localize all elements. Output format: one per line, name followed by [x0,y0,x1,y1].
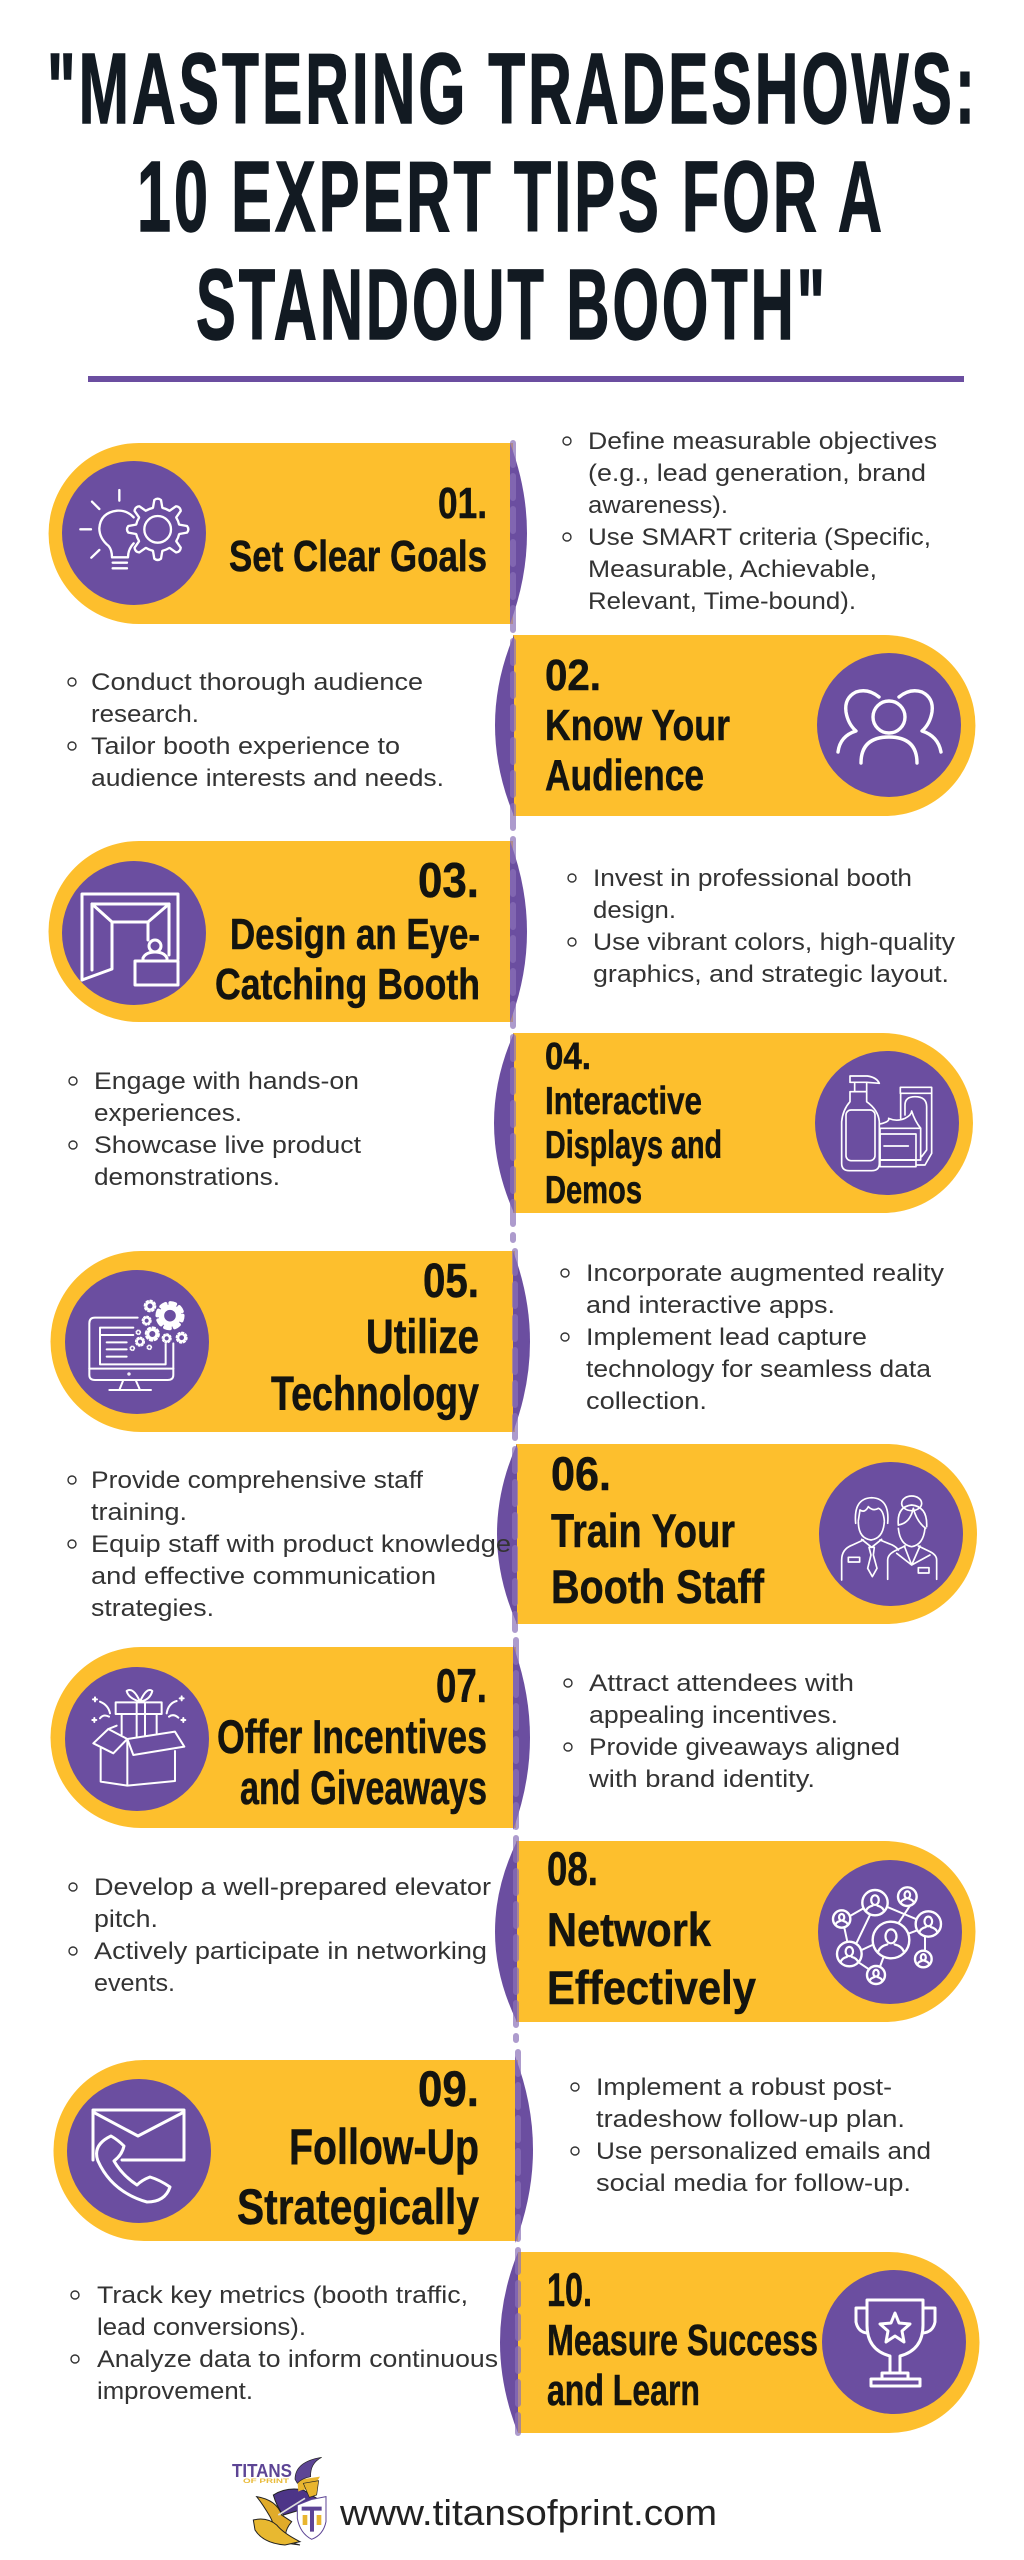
heading 07: 07. [436,1659,487,1712]
heading 01: 01. [438,479,487,528]
heading 03 [215,854,480,1009]
text block 05: Implement lead capture [586,1324,867,1351]
heading 03: Design an Eye- [230,910,480,959]
icon: booth staff [819,1462,963,1606]
icon: booth [62,861,206,1005]
heading 06 [551,1447,764,1613]
banner 05 [50,1251,515,1432]
heading 02: 02. [545,651,601,700]
text block 07: Attract attendees with [589,1670,854,1697]
text block 03: graphics, and strategic layout. [593,961,949,988]
banner 10 [518,2252,980,2433]
heading 05 [271,1255,479,1421]
heading 04: Demos [545,1169,642,1212]
text block 02: Tailor booth experience to [91,733,400,760]
heading 09: Strategically [237,2179,479,2235]
icon: mail and phone [67,2079,211,2223]
heading 06: Train Your [551,1504,735,1557]
heading 02: Know Your [545,701,730,750]
panel: tip 10 [71,2252,980,2433]
text block 04: experiences. [94,1100,242,1127]
heading 04 [545,1036,722,1212]
banner 01 [49,443,513,624]
heading 07: and Giveaways [240,1761,487,1814]
text block 06: and effective communication [91,1563,436,1590]
panel: tip 04 [69,1033,973,1213]
heading 08: Effectively [547,1961,756,2014]
heading 04: Interactive [545,1080,702,1123]
text block 02: audience interests and needs. [91,765,444,792]
heading 10: Measure Success [547,2316,818,2365]
text block 09 [571,2074,931,2197]
panel: tip 09 [54,2056,931,2243]
panel: tip 06 [68,1444,977,1624]
text block 02: research. [91,701,199,728]
panel: tip 08 [69,1841,976,2022]
banner 08 [516,1841,976,2022]
text block 02 [68,669,444,792]
heading 04: 04. [545,1036,591,1078]
text block 04: Engage with hands-on [94,1068,359,1095]
text block 04: Showcase live product [94,1132,361,1159]
heading 05: 05. [423,1255,479,1308]
heading 05: Technology [271,1368,479,1421]
heading 05: Utilize [366,1311,479,1364]
text block 08: Develop a well-prepared elevator [94,1874,491,1901]
heading 10: 10. [547,2263,592,2316]
footer logo: TITANS [232,2461,292,2481]
heading 02: Audience [545,751,704,800]
icon: lightbulb and gear [62,461,206,605]
title [47,33,978,361]
heading 03: 03. [418,854,479,908]
text block 10: Track key metrics (booth traffic, [97,2282,468,2309]
heading 10: and Learn [547,2366,700,2415]
heading 03: Catching Booth [215,960,480,1009]
panel: tip 02 [68,635,975,816]
heading 07 [217,1659,487,1814]
text block 05: and interactive apps. [586,1292,835,1319]
heading 06: Booth Staff [551,1560,764,1613]
icon: computer with gears [65,1270,209,1414]
icon: network [818,1860,962,2004]
text block 05: Incorporate augmented reality [586,1260,944,1287]
icon: product bottles [815,1051,959,1195]
heading 09: Follow-Up [289,2119,479,2175]
heading 01 [229,479,487,581]
heading 04: Displays and [545,1124,722,1167]
text block 01 [563,428,937,615]
icon: gift box [65,1667,209,1811]
text block 10 [71,2282,498,2405]
heading 02 [545,651,730,800]
text block 03: Use vibrant colors, high-quality [593,929,955,956]
text block 01: (e.g., lead generation, brand [588,460,926,487]
text block 09: social media for follow-up. [596,2170,911,2197]
text block 06: Equip staff with product knowledge [91,1531,511,1558]
heading 06: 06. [551,1447,611,1500]
text block 06: training. [91,1499,187,1526]
heading 09 [237,2061,479,2235]
text block 05 [561,1260,944,1415]
heading 07: Offer Incentives [217,1710,487,1763]
heading 09: 09. [418,2061,479,2117]
text block 10: improvement. [97,2378,253,2405]
panel: tip 07 [50,1645,900,1830]
text block 01: awareness). [588,492,728,519]
text block 09: Implement a robust post- [596,2074,892,2101]
text block 03: design. [593,897,676,924]
text block 10: Analyze data to inform continuous [97,2346,498,2373]
panel: tip 01 [49,428,937,624]
text block 08: events. [94,1970,175,1997]
icon: trophy [822,2270,966,2414]
heading 10 [547,2263,818,2415]
text block 05: collection. [586,1388,707,1415]
text block 01: Measurable, Achievable, [588,556,877,583]
text block 07: appealing incentives. [589,1702,838,1729]
banner 03 [48,841,513,1022]
text block 02: Conduct thorough audience [91,669,423,696]
text block 07: with brand identity. [588,1766,815,1793]
text block 06: strategies. [91,1595,214,1622]
text block 10: lead conversions). [97,2314,306,2341]
text block 05: technology for seamless data [586,1356,932,1383]
banner 09 [54,2060,518,2241]
text block 07: Provide giveaways aligned [589,1734,900,1761]
icon: audience [817,653,961,797]
website address: www.titansofprint.com [339,2492,717,2533]
text block 09: tradeshow follow-up plan. [596,2106,905,2133]
banner 07 [50,1647,516,1828]
banner 06 [516,1444,977,1624]
banner 02 [513,635,975,816]
text block 08: Actively participate in networking [94,1938,487,1965]
text block 07 [564,1670,900,1793]
text block 01: Relevant, Time-bound). [588,588,856,615]
text block 04 [69,1068,361,1191]
text block 03: Invest in professional booth [593,865,912,892]
heading 08 [547,1842,756,2014]
heading 01: Set Clear Goals [229,532,487,581]
text block 06: Provide comprehensive staff [91,1467,423,1494]
heading 08: Network [547,1903,712,1956]
heading 08: 08. [547,1842,598,1895]
text block 03 [568,865,955,988]
text block 08: pitch. [94,1906,158,1933]
panel: tip 05 [50,1251,944,1432]
text block 08 [69,1874,491,1997]
banner 04 [513,1033,973,1213]
panel: tip 03 [48,841,955,1022]
footer logo [232,2457,326,2545]
text block 01: Define measurable objectives [588,428,937,455]
text block 04: demonstrations. [94,1164,280,1191]
text block 01: Use SMART criteria (Specific, [588,524,931,551]
text block 06 [68,1467,511,1622]
text block 09: Use personalized emails and [596,2138,931,2165]
footer logo: OF PRINT [243,2478,289,2485]
